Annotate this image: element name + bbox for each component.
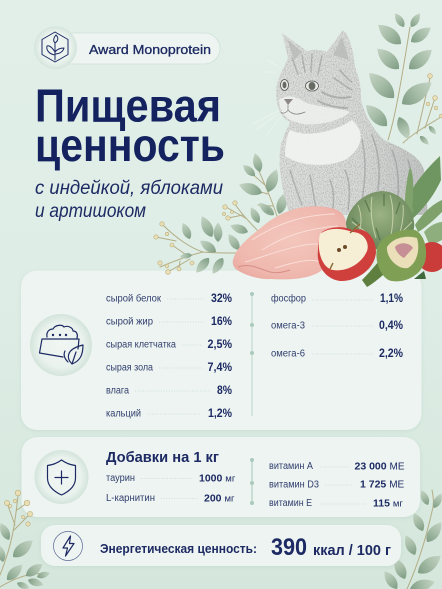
panel: composition [21, 270, 422, 430]
list: left nutrients: 32% [211, 291, 232, 305]
subtitle: и артишоком [35, 201, 146, 222]
list: left nutrients: 16% [211, 314, 232, 328]
illustration: turkey [233, 206, 346, 279]
badge: Award Monoprotein: Award Monoprotein [89, 43, 211, 57]
list: vitamins: 115 мг [373, 498, 403, 510]
list: left nutrients: сырая зола [106, 362, 153, 374]
list: additives: 1000 мг [199, 472, 236, 484]
badge: Award Monoprotein [34, 26, 220, 69]
list: left nutrients: 2,5% [208, 337, 232, 351]
icon: shield with plus [34, 450, 88, 504]
list: vitamins: 1 725 МЕ [360, 478, 405, 490]
list: vitamins: витамин E [269, 498, 312, 509]
cat eyes [280, 80, 288, 90]
list: vitamins [250, 458, 405, 510]
illustration: cat [252, 30, 428, 215]
cat chest [285, 120, 361, 165]
icon: food bowl with leaf [30, 314, 92, 376]
label: energy value: Энергетическая ценность: [100, 541, 257, 556]
subtitle: с индейкой, яблоками [35, 178, 223, 199]
list: additives: таурин [106, 473, 135, 484]
list: left nutrients: 8% [217, 383, 232, 397]
panel: energy value [41, 525, 401, 566]
title: Пищевая [35, 80, 221, 132]
cat stripes [290, 54, 412, 212]
list: left nutrients: влага [106, 386, 129, 396]
list: left nutrients: сырой белок [106, 292, 162, 304]
cat face [279, 96, 350, 124]
list: left nutrients [106, 291, 232, 420]
illustration: red apple [417, 242, 442, 272]
heading: additives per kg: Добавки на 1 кг [106, 449, 219, 466]
value: 390 kcal per 100 g [271, 534, 391, 561]
illustration: big leaves behind artichoke [396, 156, 442, 246]
list: vitamins: витамин D3 [269, 480, 319, 490]
illustration: left foliage [154, 152, 289, 276]
list: vitamins: 23 000 МЕ [354, 460, 405, 472]
list: left nutrients: кальций [106, 408, 141, 420]
illustration: bottom left branch [0, 490, 51, 589]
list: left nutrients: 1,2% [208, 406, 232, 420]
subtitle [35, 178, 223, 222]
value: 390 kcal per 100 g: ккал / 100 г [313, 542, 391, 559]
list: left nutrients: сырой жир [106, 316, 153, 328]
illustration: apple half [318, 224, 376, 281]
icon: hexagon with plant [42, 32, 68, 62]
list: right nutrients: 1,1% [380, 291, 403, 305]
list: additives [106, 472, 236, 504]
panel: additives [22, 437, 420, 517]
icon: lightning bolt [54, 532, 82, 560]
title [35, 80, 225, 171]
list: right nutrients [250, 291, 403, 416]
list: right nutrients: 0,4% [379, 318, 403, 332]
list: right nutrients: омега-3 [271, 320, 305, 332]
value: 390 kcal per 100 g: 390 [271, 534, 307, 561]
illustration: artichoke cut [362, 230, 426, 287]
illustration: top right foliage [361, 11, 442, 147]
list: right nutrients: омега-6 [271, 348, 305, 360]
list: right nutrients: 2,2% [379, 346, 403, 360]
list: left nutrients: сырая клетчатка [106, 340, 176, 350]
list: left nutrients: 7,4% [208, 360, 232, 374]
illustration: artichoke whole [346, 191, 414, 250]
illustration: bottom right branch [381, 489, 442, 589]
list: additives: L-карнитин [106, 493, 155, 504]
list: right nutrients: фосфор [271, 292, 306, 304]
title: ценность [35, 119, 225, 171]
list: additives: 200 мг [204, 492, 235, 504]
list: vitamins: витамин A [269, 461, 313, 472]
